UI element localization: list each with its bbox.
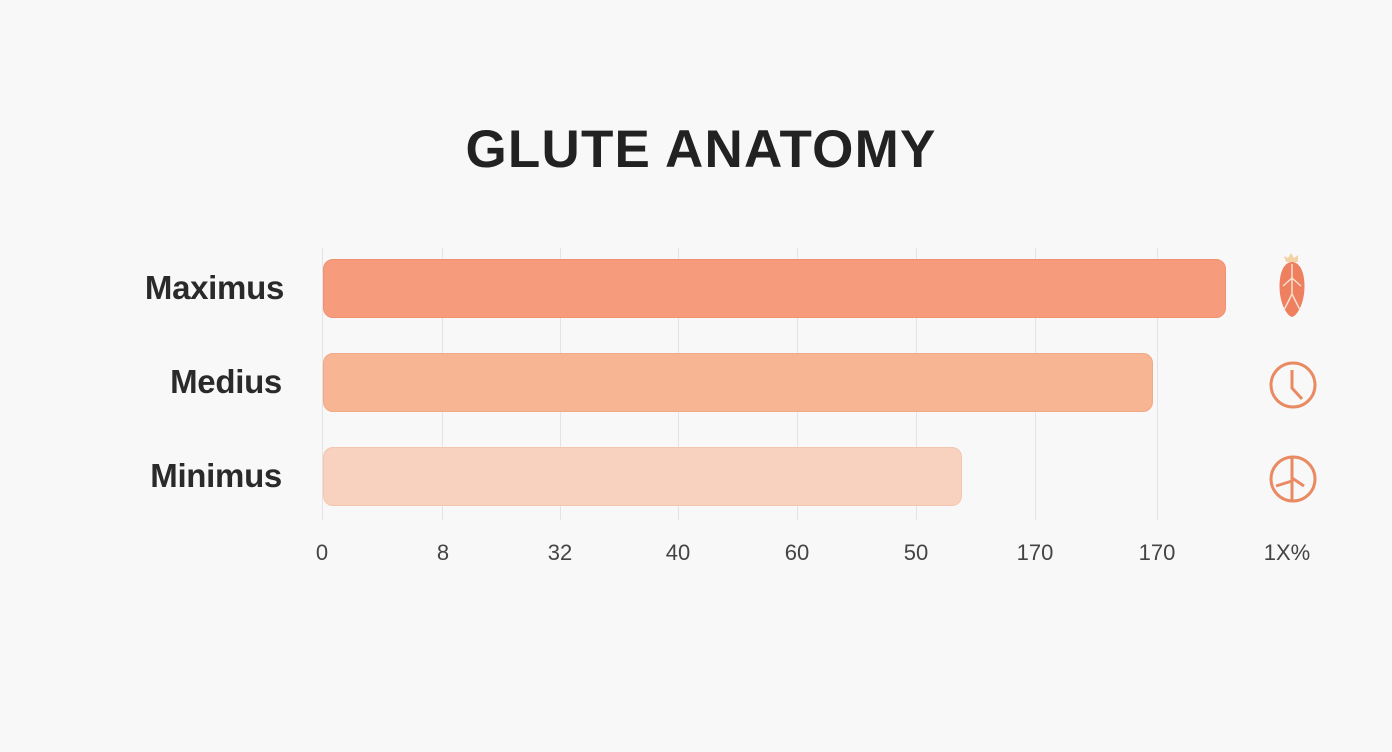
icon: peace: [1270, 456, 1316, 502]
label: Medius: Medius: [170, 363, 282, 400]
label: Maximus: Maximus: [145, 269, 284, 306]
axis labels: 170: [1139, 540, 1175, 565]
axis labels: 170: [1017, 540, 1053, 565]
axis labels: [316, 540, 1310, 565]
axis labels: 50: [904, 540, 928, 565]
bar: Maximus: [323, 259, 1226, 318]
axis labels: 60: [785, 540, 809, 565]
icon: clock: [1270, 362, 1316, 408]
title: GLUTE ANATOMY: [466, 120, 936, 179]
axis labels: 1X%: [1264, 540, 1310, 565]
axis labels: 40: [666, 540, 690, 565]
axis labels: 0: [316, 540, 328, 565]
label: Minimus: Minimus: [150, 457, 282, 494]
bar: Medius: [323, 353, 1153, 412]
bar chart: [145, 259, 1226, 506]
bar: Minimus: [323, 447, 962, 506]
axis labels: 8: [437, 540, 449, 565]
icon: muscle: [1280, 253, 1304, 317]
axis labels: 32: [548, 540, 572, 565]
